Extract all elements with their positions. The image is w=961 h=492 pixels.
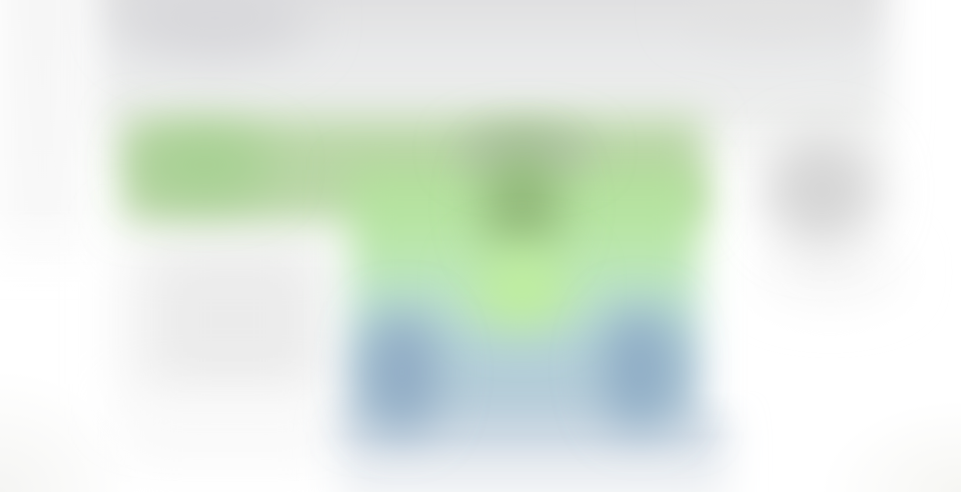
panel: green and blue central block <box>350 126 700 432</box>
header band <box>98 0 888 185</box>
right side grey callout <box>760 134 900 302</box>
panel: green horizontal band <box>122 118 704 222</box>
right blue circle <box>604 308 676 428</box>
bright green centre column <box>470 248 574 328</box>
dark green centre spot <box>484 150 560 260</box>
pale base under central block <box>340 390 725 492</box>
grey-green shading above centre spot <box>455 126 595 174</box>
left blue circle <box>366 312 438 432</box>
lower-left text block <box>125 235 335 465</box>
